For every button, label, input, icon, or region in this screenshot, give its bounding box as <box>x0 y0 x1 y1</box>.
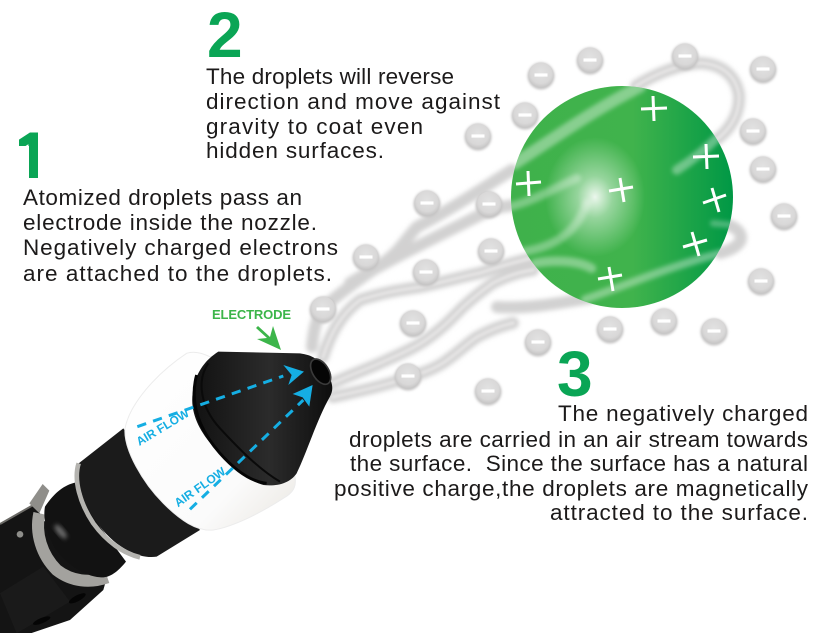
black collar <box>44 483 126 577</box>
step 1 text: Negatively charged electrons <box>23 235 338 260</box>
step 2 number: 2 <box>207 0 243 71</box>
step 3 text: droplets are carried in an air stream towards <box>349 427 808 452</box>
nozzle assembly <box>0 352 335 633</box>
step 2 text: The droplets will reverse <box>206 64 454 89</box>
step 2 text: gravity to coat even <box>206 114 423 139</box>
step 3 text: the surface. Since the surface has a natural <box>350 451 808 476</box>
metal clamp ring <box>29 484 107 581</box>
white shell <box>125 352 295 530</box>
step 2 text <box>206 64 501 163</box>
air flow arrow upper <box>134 365 304 449</box>
droplet streams <box>312 63 741 397</box>
metal ring <box>77 463 140 557</box>
electrode label: ELECTRODE <box>212 307 291 322</box>
black cone tip <box>192 352 332 485</box>
step 3 number: 3 <box>557 338 593 410</box>
step 3 text: attracted to the surface. <box>550 500 808 525</box>
step 2 text: direction and move against <box>206 89 501 114</box>
step 1 number: 1 <box>15 120 51 192</box>
air flow arrow lower: AIR FLOW <box>172 464 229 510</box>
step 3 text <box>334 401 809 525</box>
air flow arrow lower <box>172 385 313 510</box>
step 2 text: hidden surfaces. <box>206 138 384 163</box>
air flow arrow upper: AIR FLOW <box>134 406 192 449</box>
step 1 text <box>23 185 338 286</box>
nozzle body <box>0 504 107 633</box>
step 1 text: are attached to the droplets. <box>23 261 332 286</box>
step 3 text: The negatively charged <box>558 401 808 426</box>
step 1 text: electrode inside the nozzle. <box>23 210 317 235</box>
black cylinder <box>78 428 200 557</box>
step 3 text: positive charge,the droplets are magnetically <box>334 476 809 501</box>
electrode arrow <box>256 326 281 350</box>
green sphere with positive charges <box>510 86 733 308</box>
step 1 text: Atomized droplets pass an <box>23 185 302 210</box>
collar highlight <box>53 523 69 540</box>
droplets: negative charges <box>310 44 798 406</box>
